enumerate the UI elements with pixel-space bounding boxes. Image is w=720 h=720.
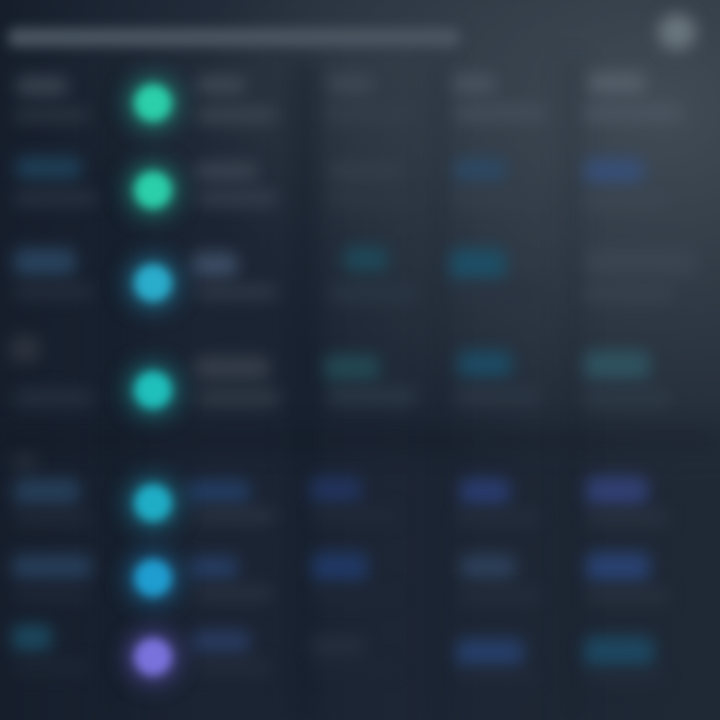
icon: status dot row 4 bbox=[134, 371, 172, 409]
icon: status dot row 7 bbox=[134, 638, 172, 676]
icon: top right badge bbox=[658, 14, 696, 50]
icon: status dot row 2 bbox=[134, 171, 172, 209]
icon: status dot row 6 bbox=[134, 559, 172, 597]
icon: status dot row 1 bbox=[134, 84, 172, 122]
icon: status dot row 5 bbox=[134, 484, 172, 522]
icon: status dot row 3 bbox=[134, 264, 172, 302]
title bbox=[8, 28, 460, 47]
